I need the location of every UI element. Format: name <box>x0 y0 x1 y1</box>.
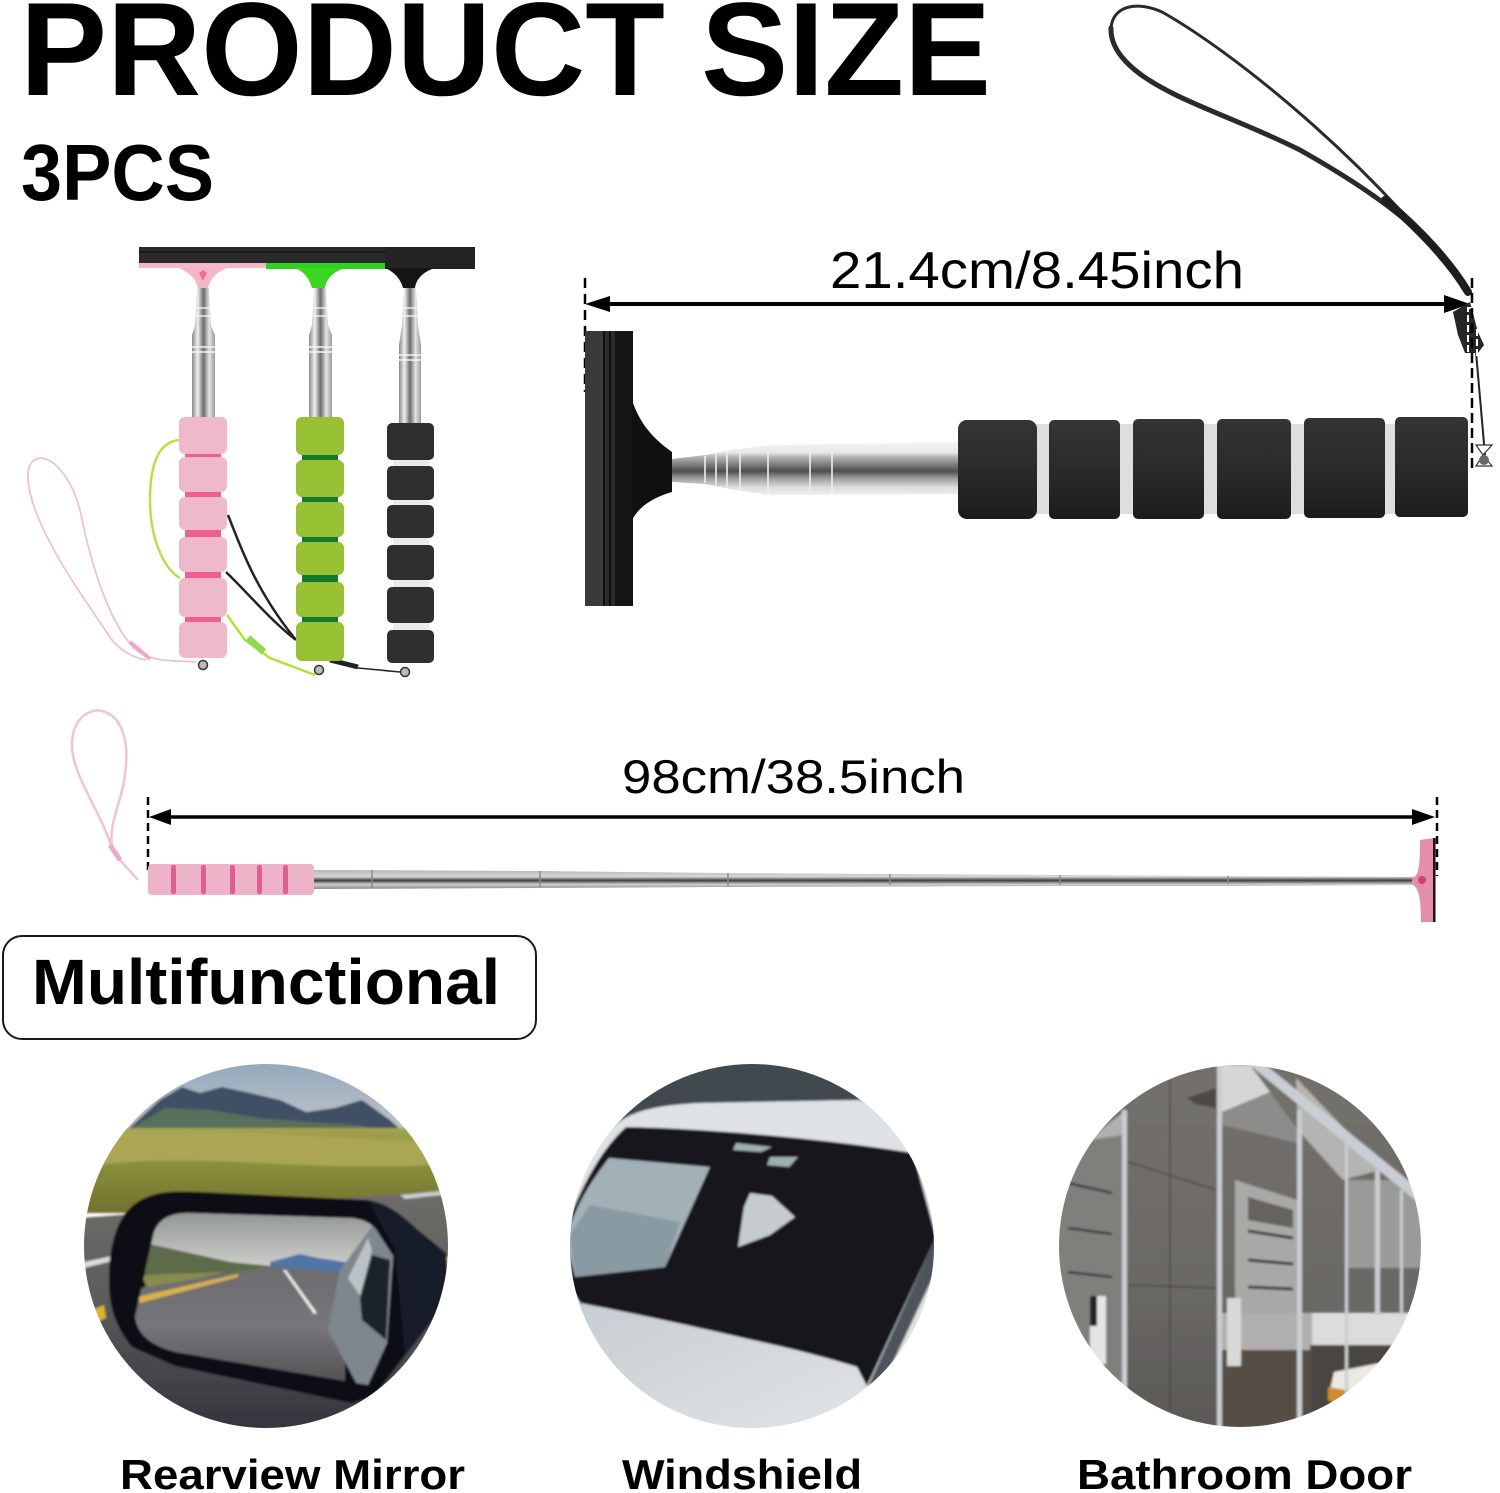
squeegee blade <box>585 331 633 606</box>
pink wrist strap <box>28 458 196 662</box>
extended pink squeegee <box>72 711 1436 922</box>
squeegee holders <box>178 268 228 288</box>
pillar <box>867 1237 934 1387</box>
windshield glass <box>565 1127 936 1388</box>
side padded panel <box>1059 1120 1122 1383</box>
mountains <box>129 1086 399 1130</box>
ceiling and shower head <box>1222 1065 1270 1112</box>
glass back room <box>1348 1180 1423 1268</box>
pink squeegee head <box>1412 838 1436 922</box>
dash sticker <box>733 1143 798 1167</box>
telescopic shaft <box>312 870 1420 889</box>
telescopic shaft <box>672 442 960 495</box>
dimension label: extended length: 98cm/38.5inch <box>622 750 965 803</box>
dimension label: head width: 21.4cm/8.45inch <box>830 242 1244 300</box>
black straps <box>226 515 296 640</box>
towel rail radiator <box>1235 1180 1297 1325</box>
mirror glass <box>130 1210 400 1390</box>
shaft ring highlights <box>192 308 421 360</box>
green lanyard clasp <box>227 615 315 675</box>
photo: windshield <box>565 1060 940 1440</box>
green strap <box>150 440 180 578</box>
black squeegee close-up <box>585 6 1492 606</box>
telescopic shafts <box>192 288 421 423</box>
product photo: three coloured squeegees <box>28 247 475 676</box>
dimension arrow: extended length <box>148 797 1437 876</box>
towels <box>1329 1361 1380 1392</box>
pink strap <box>72 711 138 880</box>
sky <box>127 1064 405 1129</box>
interior seat highlight <box>738 1193 795 1247</box>
dashed end line <box>1468 278 1477 472</box>
black handle <box>387 423 434 663</box>
black strap <box>1111 6 1468 292</box>
hood <box>580 1301 868 1414</box>
grass field <box>80 1128 452 1213</box>
upper left ceiling wedge <box>1090 1112 1123 1140</box>
badge: Multifunctional: Multifunctional <box>32 946 500 1018</box>
green handle <box>296 417 344 661</box>
badge: Multifunctional <box>3 936 536 1039</box>
strap clasp <box>1453 302 1484 353</box>
car roof <box>573 1098 934 1387</box>
subtitle: 3PCS: 3PCS <box>21 128 214 217</box>
photo: bathroom door <box>1055 1060 1430 1440</box>
cord and charm <box>1476 352 1492 466</box>
end charms <box>198 660 410 676</box>
dimension arrow: head width <box>585 278 1470 392</box>
strap clip <box>110 845 120 860</box>
door frames <box>1122 1060 1420 1440</box>
mirror housing <box>109 1192 450 1403</box>
squeegee holder <box>632 400 672 520</box>
foam handle <box>958 417 1468 519</box>
pink handle <box>148 864 314 895</box>
tile seams <box>1128 1080 1217 1410</box>
reflection <box>566 1158 710 1277</box>
squeegee blades <box>139 247 475 269</box>
road <box>80 1190 452 1432</box>
pink handle <box>179 417 227 658</box>
photo: rearview mirror <box>80 1060 452 1432</box>
shower mixers <box>1227 1298 1241 1366</box>
background <box>613 1064 866 1129</box>
wall <box>1109 1065 1409 1426</box>
